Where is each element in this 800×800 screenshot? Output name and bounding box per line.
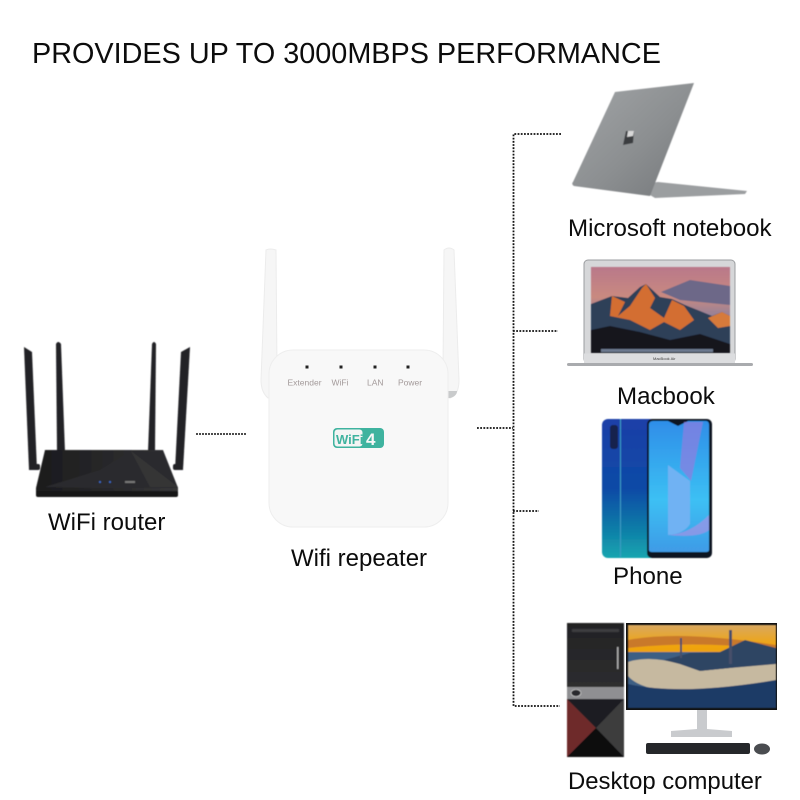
- label: Macbook: Macbook: [617, 383, 716, 410]
- status lights and labels: LAN: [367, 378, 384, 388]
- left antenna: [261, 249, 277, 398]
- WiFi 4 badge: [333, 428, 384, 449]
- phone screen: [647, 419, 712, 558]
- icon: Microsoft notebook: [572, 83, 747, 198]
- keyboard base: [567, 363, 753, 366]
- status lights and labels: WiFi: [332, 378, 349, 388]
- monitor stand: [671, 710, 732, 737]
- label: Wifi repeater: Wifi repeater: [291, 545, 427, 572]
- right antenna: [443, 248, 459, 398]
- status lights and labels: [288, 366, 422, 388]
- phone back: [602, 419, 656, 558]
- icon: Wifi repeater: [261, 248, 459, 527]
- router body: [36, 450, 178, 497]
- screen: [591, 267, 730, 353]
- icon: WiFi router: [24, 342, 190, 497]
- icon: Macbook: MacBook Air: [653, 356, 676, 361]
- title: PROVIDES UP TO 3000MBPS PERFORMANCE: [32, 38, 661, 70]
- label: Microsoft notebook: Microsoft notebook: [568, 215, 773, 242]
- label: Phone: Phone: [613, 563, 683, 590]
- icon: Phone: [602, 419, 712, 558]
- label: WiFi router: WiFi router: [48, 509, 165, 536]
- status lights and labels: Power: [398, 378, 422, 388]
- arrow: router to repeater dotted link: [196, 433, 246, 435]
- status lights and labels: Extender: [288, 378, 322, 388]
- WiFi 4 badge: 4: [366, 430, 376, 449]
- label: Desktop computer: Desktop computer: [568, 768, 762, 795]
- icon: Desktop computer: [567, 623, 777, 757]
- monitor: [626, 623, 777, 710]
- router antennas: [24, 342, 190, 470]
- arrow: repeater to devices dotted tree: [477, 134, 561, 706]
- mouse: [754, 744, 770, 754]
- repeater body: [269, 350, 448, 527]
- tower: [567, 623, 624, 757]
- keyboard: [646, 743, 750, 754]
- lid: [584, 260, 735, 363]
- icon: Macbook: [567, 260, 753, 366]
- WiFi 4 badge: WiFi: [336, 432, 363, 447]
